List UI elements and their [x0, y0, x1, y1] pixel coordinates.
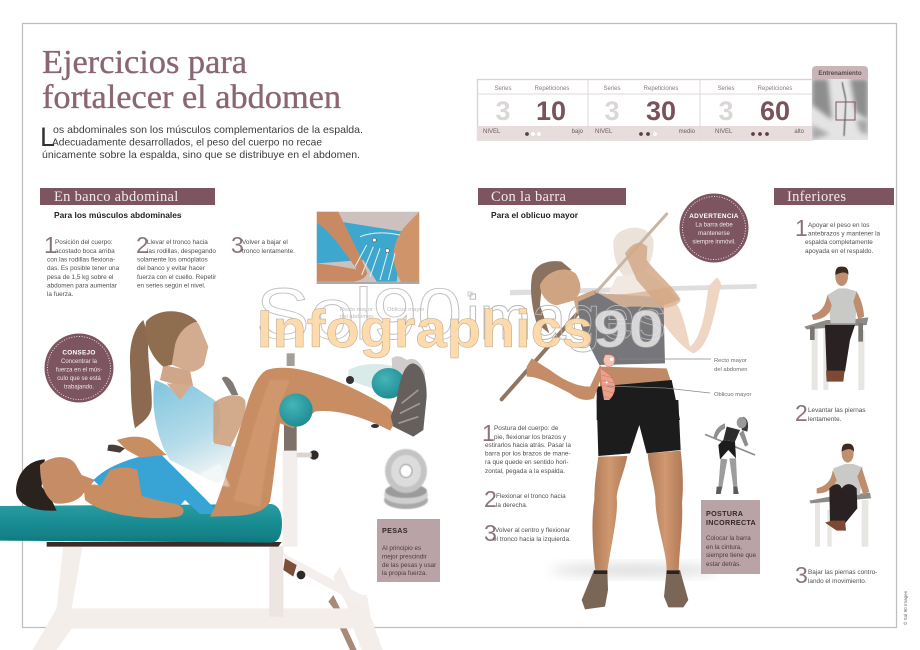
step 2 banco: las rodillas, despegando [147, 248, 216, 255]
inferiores step 2: lentamente. [808, 416, 842, 423]
pesas box: Al principio es [382, 545, 421, 552]
pesas box: de las pesas y usar [382, 562, 436, 569]
step 2 banco: Llevar el tronco hacia [147, 239, 208, 246]
training thumbnail: Entrenamiento [818, 70, 862, 77]
oblique step 1: 1 [482, 420, 495, 446]
level: medio: NIVEL [595, 129, 613, 135]
watermark: del abdomen [340, 314, 374, 320]
oblique step 2: Flexionar el tronco hacia [496, 493, 566, 500]
inferiores step 1 [795, 215, 881, 255]
postura incorrecta box [701, 500, 760, 574]
level: medio: Series [603, 86, 621, 92]
inferiores step 3: Bajar las piernas contro- [808, 569, 877, 576]
callout: advertencia: siempre inmóvil. [692, 240, 736, 246]
step 1 banco: das. Es posible tener una [47, 265, 120, 272]
title [42, 44, 341, 116]
section header: En banco abdominal [40, 188, 215, 205]
section header: Inferiores: Inferiores [787, 189, 846, 205]
inferiores step 2: 2 [795, 400, 808, 426]
floor shadow [550, 565, 720, 575]
watermark: Infographics [257, 300, 593, 359]
level: medio: 3 [604, 96, 620, 126]
level: bajo: 10 [536, 96, 566, 126]
step 2 banco [136, 232, 217, 290]
section header: Inferiores [774, 188, 894, 205]
oblique step 3: el tronco hacia la izquierda. [493, 536, 571, 543]
consejo callout: trabajando. [64, 384, 94, 390]
section header: Con la barra: Con la barra [491, 189, 567, 205]
consejo callout: fuerza en el mús- [56, 368, 102, 374]
step 2 banco: fuerza con el cuello. Repetir [137, 274, 217, 281]
callout: advertencia: ADVERTENCIA [689, 213, 739, 220]
legs [582, 400, 688, 609]
postura incorrecta box: POSTURA [706, 509, 743, 518]
consejo callout [44, 334, 114, 402]
level: bajo: Series [494, 86, 512, 92]
oblique step 1: barra por los brazos de mane- [485, 450, 571, 458]
postura incorrecta box: INCORRECTA [706, 518, 756, 527]
pesas box: mejor prescindir [382, 554, 427, 560]
postura incorrecta box: estar detrás. [706, 561, 741, 568]
seated figure [130, 311, 246, 483]
step 1 banco: abdomen para aumentar [47, 282, 118, 290]
oblique step 1: ra que quede en sentido hori- [485, 459, 568, 466]
step 3 banco [231, 232, 295, 258]
muscle labels: del abdomen [714, 367, 748, 373]
level: medio: Repeticiones [644, 86, 678, 92]
inferiores step 2: Levantar las piernas [808, 407, 866, 414]
illustration: man legs down [804, 267, 868, 390]
oblique step 3: Volver al centro y flexionar [495, 527, 571, 534]
illustration: standing woman with bar [502, 214, 757, 609]
oblique step 1: pie, flexionar los brazos y [494, 434, 567, 441]
oblique step 3: 3 [484, 520, 497, 546]
level: bajo [483, 86, 584, 136]
level: alto: Series [717, 86, 735, 92]
step 1 banco: con las rodillas flexiona- [47, 256, 115, 264]
postura incorrecta box: Colocar la barra [706, 535, 751, 542]
inferiores step 2 [795, 400, 866, 426]
pesas box: PESAS [382, 526, 408, 535]
inferiores step 3 [795, 562, 877, 588]
pesas box: la propia fuerza. [382, 570, 427, 577]
illustration: man legs up [809, 444, 871, 547]
intro text: os abdominales son los músculos complementarios de la espalda. [53, 124, 363, 136]
level: alto: NIVEL [715, 129, 733, 135]
watermark: Sol90 [256, 275, 462, 355]
step 2 banco: solamente los omóplatos [137, 256, 208, 264]
oblique step 2: la derecha. [496, 502, 528, 509]
step 1 banco: 1 [44, 232, 57, 258]
watermark: Recto mayor [340, 307, 373, 313]
rollers [372, 368, 405, 399]
level: alto [715, 86, 805, 136]
inferiores step 1: 1 [795, 215, 808, 241]
watermark: 90 [593, 300, 664, 359]
level: alto: 3 [718, 96, 734, 126]
training thumbnail [812, 66, 868, 140]
intro text: L [40, 122, 55, 152]
training levels table [477, 80, 812, 140]
oblique step 1: Postura del cuerpo: de [494, 425, 559, 432]
muscle diagram [600, 355, 615, 403]
level: bajo: bajo [572, 129, 584, 135]
step 1 banco: la fuerza. [47, 291, 74, 298]
credit: © Sol 90 Images [902, 590, 908, 625]
illustration: incorrect posture [705, 417, 755, 494]
knee roller [279, 393, 313, 427]
shoe [391, 363, 427, 437]
oblique step 1 [482, 420, 571, 475]
postura incorrecta box: en la cintura, [706, 544, 742, 551]
consejo callout: CONSEJO [62, 350, 96, 356]
section header: Con la barra [478, 188, 626, 205]
watermark: images [466, 284, 666, 353]
oblique step 2: 2 [484, 486, 497, 512]
intro text: únicamente sobre la espalda, sino que se distribuye en el abdomen. [42, 149, 360, 161]
muscle labels: Oblicuo mayor [714, 392, 751, 398]
consejo callout: Concentrar la [61, 359, 98, 365]
level: medio [595, 86, 696, 136]
callout: advertencia: mantenerse [698, 231, 731, 237]
intro text: Adecuadamente desarrollados, el peso del cuerpo no recae [52, 136, 322, 148]
icon: weight plates [384, 449, 428, 509]
step 3 banco: 3 [231, 232, 244, 258]
main bar [502, 292, 597, 399]
illustration: bench exercise [0, 311, 427, 650]
step 1 banco [44, 232, 120, 298]
step 1 banco: Posición del cuerpo: [55, 239, 113, 246]
inferiores step 3: 3 [795, 562, 808, 588]
muscle labels [607, 358, 751, 398]
oblique step 3 [484, 520, 571, 546]
lying figure [16, 437, 220, 518]
leg [210, 368, 398, 517]
oblique step 1: zontal, pegada a la espalda. [485, 468, 565, 475]
level: bajo: 3 [495, 96, 511, 126]
level: alto: alto [794, 129, 805, 135]
level: medio: medio [679, 129, 696, 135]
title: Ejercicios para [42, 44, 247, 81]
level: bajo: NIVEL [483, 129, 501, 135]
consejo callout: culo que se está [57, 376, 102, 382]
step 1 banco: acostado boca arriba [55, 248, 115, 255]
step 3 banco: tronco lentamente. [242, 248, 295, 255]
ghost foot and roller [348, 356, 425, 397]
callout: advertencia [680, 194, 748, 262]
level: medio: 30 [646, 96, 676, 126]
level: alto: Repeticiones [758, 86, 792, 92]
upper body [502, 214, 757, 420]
step 1 banco: pesa de 1,5 kg sobre el [47, 274, 113, 281]
step 2 banco: en series según el nivel. [137, 282, 206, 290]
postura incorrecta box: siempre tiene que [706, 552, 757, 559]
pesas box [377, 519, 440, 582]
ghost fade [200, 463, 230, 487]
section header: En banco abdominal: En banco abdominal [54, 189, 179, 205]
muscle labels: Recto mayor [714, 358, 747, 364]
watermark [256, 275, 666, 359]
watermark: Oblicuo mayor [387, 307, 424, 313]
inferiores step 1: antebrazos y mantener la [808, 230, 881, 238]
step 2 banco: del banco y evitar hacer [137, 265, 206, 272]
step 3 banco: Volver a bajar el [242, 239, 288, 246]
intro text [40, 122, 363, 161]
subheading: abdominales: Para los músculos abdominales [54, 210, 182, 220]
inferiores step 1: apoyada en el respaldo. [805, 248, 873, 255]
oblique step 2 [484, 486, 566, 512]
inset photo: abdominal muscles [317, 212, 419, 284]
level: bajo: Repeticiones [535, 86, 569, 92]
bench frame [0, 353, 383, 650]
title: fortalecer el abdomen [42, 79, 341, 116]
level: alto: 60 [760, 96, 790, 126]
step 2 banco: 2 [136, 232, 149, 258]
subheading: oblicuo: Para el oblicuo mayor [491, 210, 579, 220]
oblique step 1: estirarlos hacia atrás. Pasar la [485, 442, 571, 449]
inferiores step 1: espalda completamente [805, 239, 873, 246]
inferiores step 1: Apoyar el peso en los [808, 222, 869, 229]
callout: advertencia: La barra debe [695, 222, 733, 228]
inferiores step 3: lando el movimiento. [808, 578, 867, 585]
